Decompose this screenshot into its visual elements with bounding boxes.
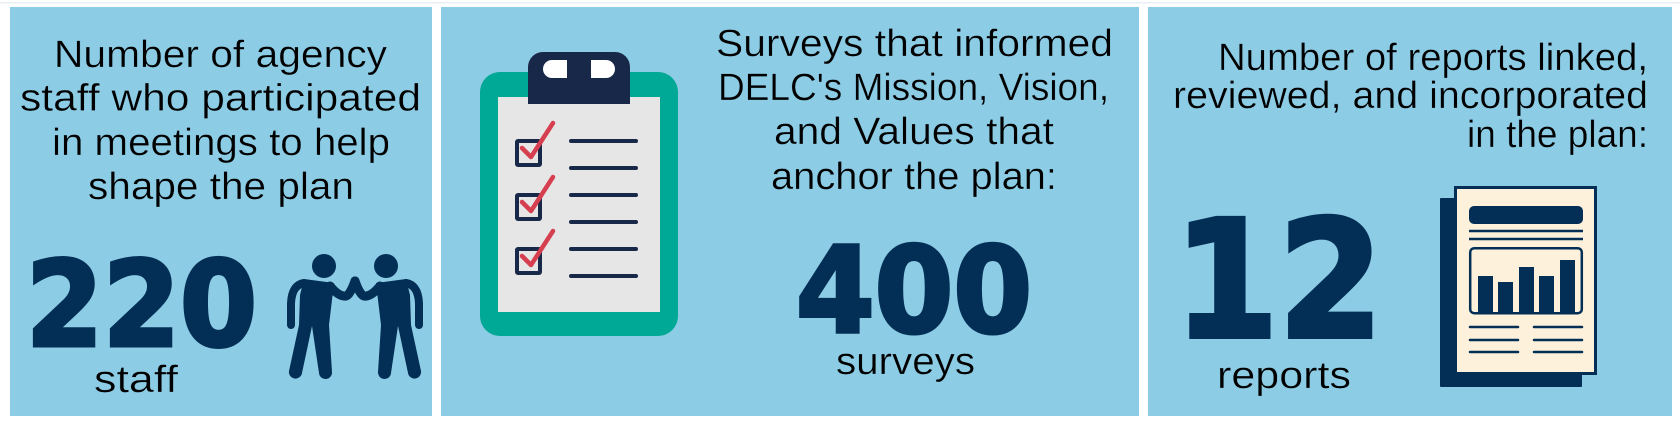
heading: reports: in the plan:	[1467, 114, 1648, 156]
number: 400: 400	[796, 223, 1032, 361]
heading: reports	[1173, 37, 1648, 156]
icon: two people fist bump	[289, 254, 421, 379]
heading: reports: Number of reports linked,	[1218, 37, 1648, 79]
heading: staff participation: staff who participated	[20, 78, 421, 120]
label: reports: reports	[1217, 355, 1351, 397]
heading: staff participation: Number of agency	[54, 34, 387, 76]
heading: staff participation: shape the plan	[88, 166, 354, 208]
heading: surveys	[716, 23, 1113, 198]
heading: surveys: anchor the plan:	[771, 156, 1057, 198]
label: staff: staff	[94, 359, 179, 401]
label: surveys: surveys	[836, 341, 975, 383]
panel: reports	[1148, 7, 1672, 416]
panel: surveys	[441, 7, 1139, 416]
heading: reports: reviewed, and incorporated	[1173, 75, 1648, 117]
icon: clipboard checklist	[480, 52, 678, 336]
icon: report document	[1440, 188, 1596, 387]
number: 12: 12	[1174, 188, 1383, 376]
heading: surveys: Surveys that informed	[716, 23, 1113, 65]
heading: staff participation	[20, 34, 421, 208]
number: 220: 220	[26, 236, 257, 374]
heading: staff participation: in meetings to help	[52, 122, 390, 164]
panel: staff	[10, 7, 432, 416]
heading: surveys: and Values that	[774, 111, 1054, 153]
heading: surveys: DELC's Mission, Vision,	[718, 67, 1109, 109]
